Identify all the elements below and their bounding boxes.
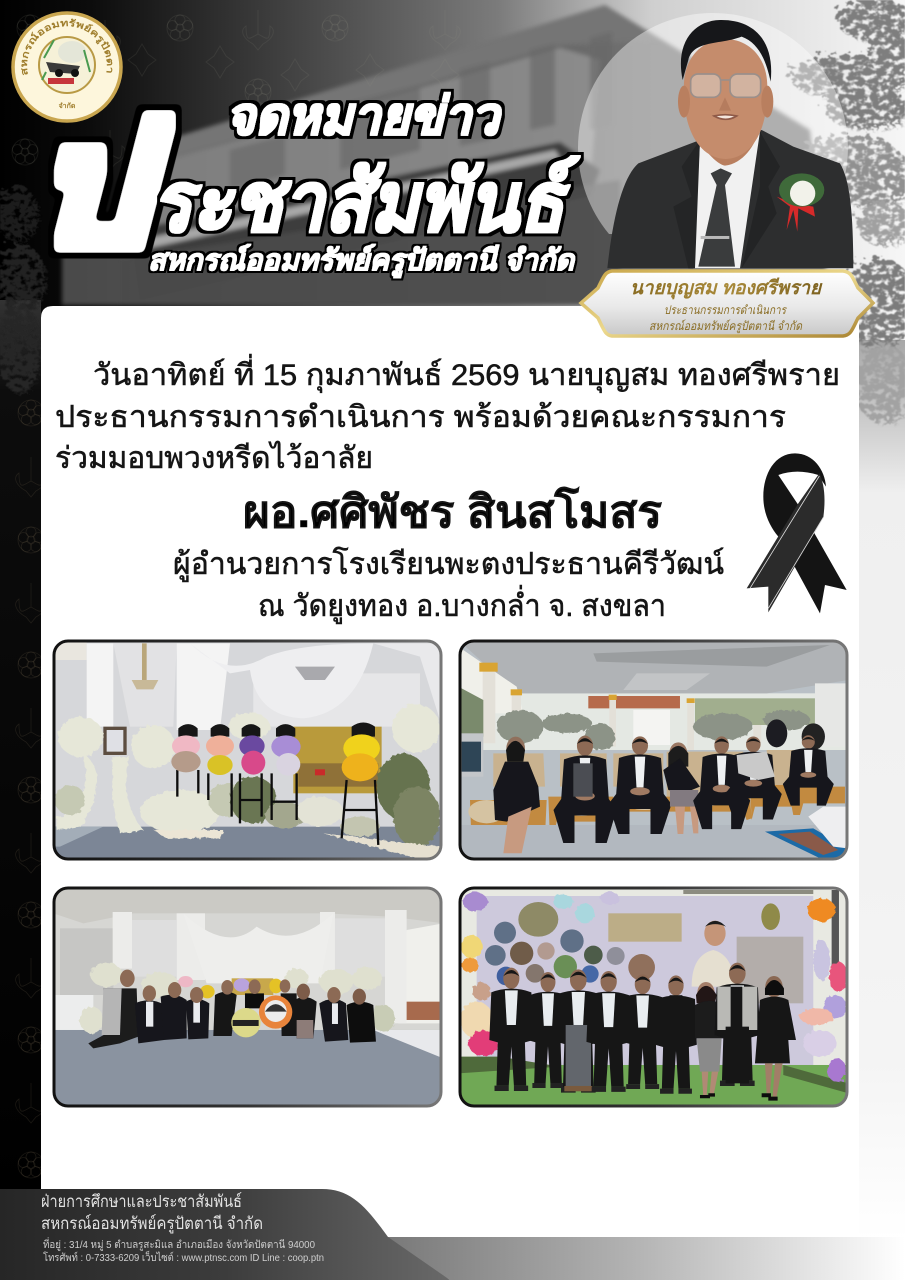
footer department: ฝ่ายการศึกษาและประชาสัมพันธ์	[41, 1192, 242, 1211]
title	[33, 88, 580, 279]
logo: จำกัด	[59, 102, 76, 110]
body line 1: วันอาทิตย์ ที่ 15 กุมภาพันธ์ 2569 นายบุญสม ทองศรีพราย	[93, 354, 840, 394]
photo: group in front of memorial backdrop	[458, 887, 848, 1110]
title line: public relations: ระชาสัมพันธ์	[152, 155, 580, 249]
logo	[11, 11, 123, 123]
photo: committee seated in pavilion	[458, 640, 848, 863]
portrait backdrop circle	[578, 13, 848, 234]
photo frame	[54, 888, 441, 1106]
body line 2: ประธานกรรมการดำเนินการ พร้อมด้วยคณะกรรมการ	[55, 401, 786, 434]
icon: black mourning ribbon	[747, 453, 847, 613]
icon: corsage flower	[777, 173, 824, 232]
left strip ornaments	[16, 400, 46, 1178]
photo: committee kneeling before wreaths	[53, 887, 443, 1110]
photo frame	[460, 641, 847, 859]
portrait: chairman	[607, 20, 853, 268]
title big letter: ป	[33, 89, 167, 279]
decorative thai ornament pattern	[12, 10, 460, 170]
panel: main white card	[41, 306, 859, 1238]
photo frame	[460, 888, 847, 1106]
presented wreaths	[231, 995, 292, 1037]
kneeling people	[88, 970, 376, 1048]
seated people	[493, 719, 834, 853]
background trees	[0, 0, 905, 425]
footer address: ที่อยู่ : 31/4 หมู่ 5 ตำบลรูสะมิแล อำเภอเมือง จังหวัดปัตตานี 94000	[43, 1237, 315, 1251]
venue: ณ วัดยูงทอง อ.บางกล่ำ จ. สงขลา	[258, 585, 666, 624]
title line: newsletter: จดหมายข่าว	[226, 88, 503, 146]
name plate	[581, 271, 873, 336]
footer phone and web: โทรศัพท์ : 0-7333-6209 เว็บไซต์ : www.ptnsc.com ID Line : coop.ptn	[43, 1250, 324, 1264]
footer bands	[0, 1189, 905, 1280]
footer organisation: สหกรณ์ออมทรัพย์ครูปัตตานี จำกัด	[41, 1214, 263, 1234]
footer contact block	[41, 1192, 324, 1264]
organisation line: สหกรณ์ออมทรัพย์ครูปัตตานี จำกัด	[649, 319, 803, 334]
title line: organisation: สหกรณ์ออมทรัพย์ครูปัตตานี จำกัด	[148, 244, 576, 279]
photo: funeral wreaths display	[53, 640, 443, 863]
announcement text	[55, 354, 840, 624]
background building photo	[62, 5, 830, 305]
chairman name: นายบุญสม ทองศรีพราย	[630, 277, 823, 300]
photo frame	[54, 641, 441, 859]
body line 3: ร่วมมอบพวงหรีดไว้อาลัย	[55, 440, 373, 475]
chairman position: ประธานกรรมการดำเนินการ	[664, 303, 787, 317]
deceased position: ผู้อำนวยการโรงเรียนพะตงประธานคีรีวัฒน์	[173, 546, 724, 582]
deceased name: ผอ.ศศิพัชร สินสโมสร	[243, 485, 662, 537]
